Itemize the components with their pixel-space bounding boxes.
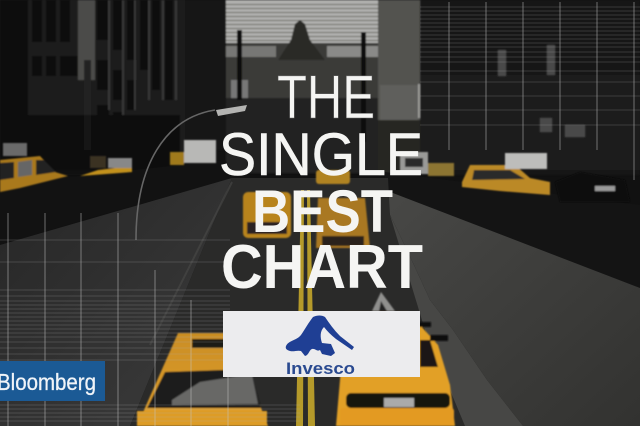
invesco logo panel bbox=[223, 311, 420, 378]
mid taxis behind title bbox=[243, 170, 370, 248]
left wall and fence bbox=[0, 160, 235, 245]
invesco wordmark: Invesco bbox=[286, 359, 355, 378]
grand central facade bbox=[226, 43, 378, 173]
bloomberg badge bbox=[0, 361, 105, 401]
street lamp bbox=[136, 110, 215, 240]
foreground taxi right bbox=[336, 292, 455, 426]
icon: invesco mountain bbox=[286, 316, 354, 356]
road bbox=[130, 178, 523, 426]
right dark building bbox=[420, 0, 640, 175]
title bbox=[219, 63, 423, 302]
distant taxis and vans bbox=[0, 140, 630, 202]
stone building center right bbox=[378, 0, 420, 120]
left building bbox=[0, 0, 640, 175]
title line: SINGLE: SINGLE bbox=[219, 121, 423, 188]
right fence and wall bbox=[385, 172, 640, 290]
double yellow road lines bbox=[296, 190, 315, 426]
foreground taxi left bbox=[137, 333, 268, 426]
bloomberg wordmark: Bloomberg bbox=[0, 369, 96, 395]
center striped tower bbox=[226, 0, 378, 43]
title line: BEST: BEST bbox=[252, 178, 393, 245]
title line: THE: THE bbox=[277, 63, 375, 131]
title line: CHART: CHART bbox=[221, 233, 423, 302]
